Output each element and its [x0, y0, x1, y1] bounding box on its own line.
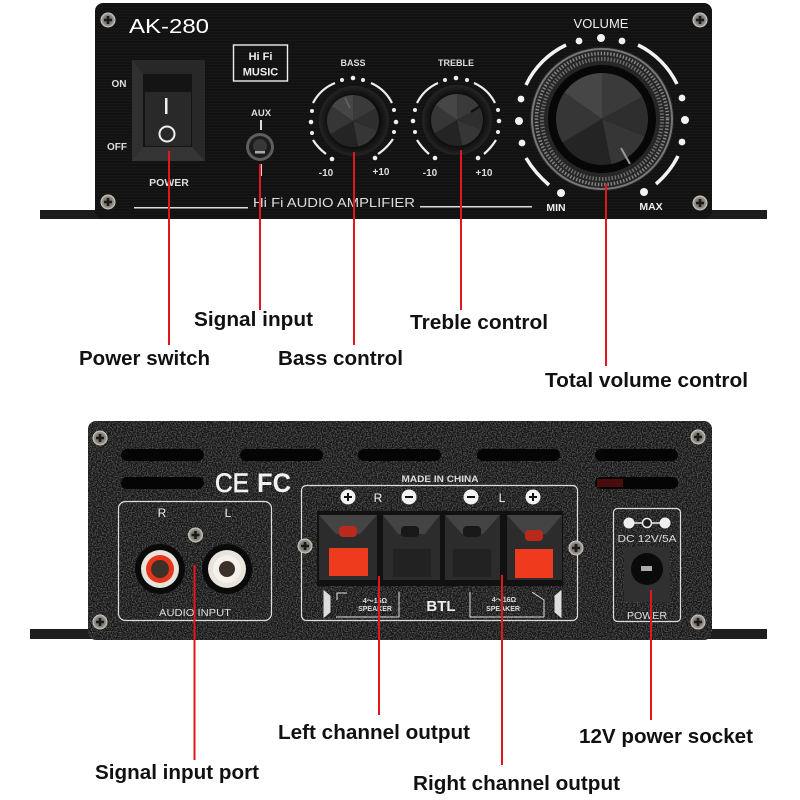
power socket block: DC 12V/5A [618, 534, 677, 545]
speaker wiring: left group [324, 591, 399, 617]
certification marks: FC [257, 468, 291, 498]
terminal block [317, 511, 563, 586]
speaker wiring: right group [470, 591, 561, 617]
label: Bass control: Bass control [278, 348, 403, 370]
knob: volume [515, 19, 689, 211]
label: Signal input port: Signal input port [95, 762, 259, 784]
power switch [107, 60, 205, 189]
knob: treble [410, 60, 502, 176]
BTL label: BTL [426, 598, 456, 615]
knob: bass: -10 [319, 168, 334, 179]
label: 12V power socket: 12V power socket [579, 726, 753, 748]
polarity symbols: L [499, 491, 506, 505]
product caption: Hi Fi AUDIO AMPLIFIER [253, 196, 415, 210]
knob: treble: -10 [423, 168, 438, 179]
audio input block: L [225, 506, 232, 520]
power switch: OFF [107, 142, 127, 153]
knob: volume: MIN [546, 202, 566, 214]
model name: AK-280 [129, 16, 209, 38]
RCA jack: right [135, 544, 185, 594]
badge: Hi Fi Music [234, 45, 288, 81]
vent slots [121, 449, 678, 489]
polarity diagram [624, 518, 670, 528]
badge: Hi Fi Music: Hi Fi [249, 51, 272, 63]
power switch: ON [112, 79, 126, 90]
speaker output block [298, 474, 584, 620]
certification marks: CE [215, 468, 249, 498]
knob: treble: +10 [476, 168, 493, 179]
screws: front [100, 12, 708, 210]
label: Total volume control: Total volume control [545, 370, 748, 392]
DC jack [624, 547, 670, 602]
label: Left channel output: Left channel output [278, 722, 470, 744]
badge: Hi Fi Music: MUSIC [243, 66, 278, 78]
RCA jack: left [202, 544, 252, 594]
polarity symbols [340, 490, 540, 505]
knob: volume: VOLUME [574, 16, 629, 31]
speaker wiring: left group: 4～16Ω [363, 598, 388, 605]
audio input block [118, 502, 272, 620]
power socket block: POWER [627, 610, 667, 622]
label: Treble control: Treble control [410, 312, 548, 334]
speaker output block: MADE IN CHINA [402, 474, 479, 484]
knob: treble: TREBLE [438, 58, 474, 68]
knob: bass [308, 60, 398, 176]
panel: front of amplifier [40, 3, 767, 221]
certification marks [215, 468, 291, 498]
speaker wiring: right group: 4～16Ω [492, 597, 517, 604]
speaker wiring: right group: SPEAKER [486, 606, 520, 613]
knob: volume: MAX [639, 201, 663, 213]
audio input block: R [158, 506, 167, 520]
aux jack [246, 108, 274, 176]
power switch: POWER [149, 177, 189, 189]
label: Right channel output: Right channel output [413, 773, 620, 795]
panel: rear of amplifier [30, 421, 767, 640]
audio input block: AUDIO INPUT [159, 607, 232, 619]
polarity symbols: R [374, 491, 383, 505]
label: Power switch: Power switch [79, 348, 210, 370]
aux jack: AUX [251, 108, 272, 119]
knob: bass: +10 [373, 167, 390, 178]
power socket block [614, 508, 680, 622]
screws: rear [92, 430, 706, 630]
knob: bass: BASS [340, 58, 366, 68]
label: Signal input: Signal input [194, 309, 313, 331]
leader lines [169, 150, 651, 765]
speaker wiring: left group: SPEAKER [358, 606, 392, 613]
